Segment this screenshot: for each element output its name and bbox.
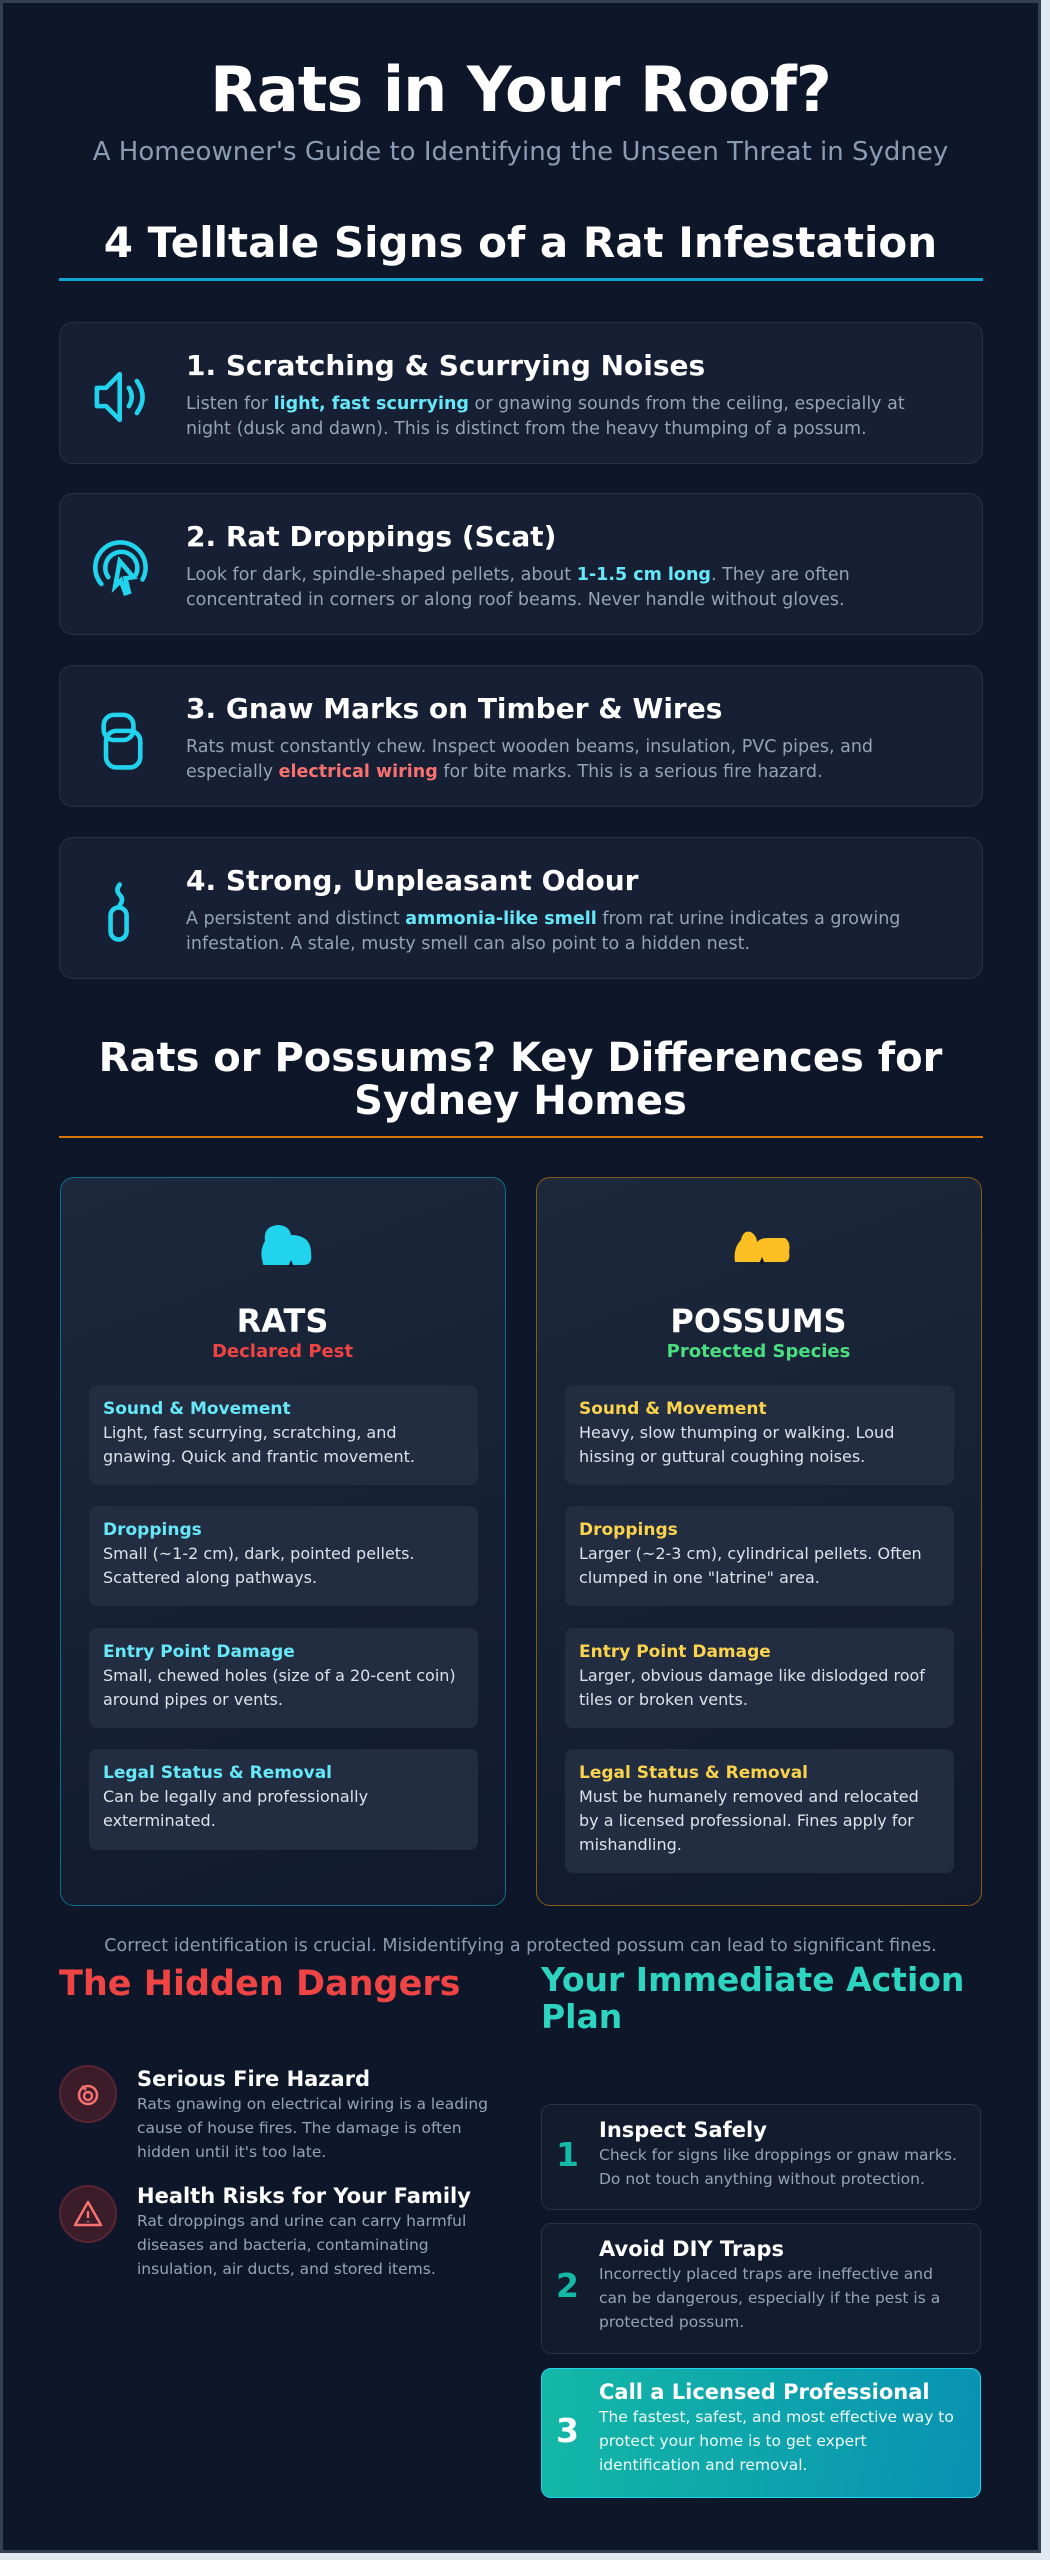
card: sign 2 droppings <box>59 493 983 635</box>
step 2: Avoid DIY Traps <box>599 2237 784 2261</box>
step 3 <box>541 2368 981 2498</box>
card: sign 2 droppings: Look for dark, spindle-shaped pellets, about 1-1.5 cm long. They are often concentrated in corners or along roof beams. Never handle without gloves. <box>186 565 850 610</box>
card: sign 1 noises: Listen for light, fast scurrying or gnawing sounds from the ceiling, especially at night (dusk and dawn). This is distinct from the heavy thumping of a possum. <box>186 394 905 438</box>
box: entry: Entry Point Damage <box>103 1642 295 1662</box>
title: Rats in Your Roof? <box>210 53 831 126</box>
box: sound <box>565 1385 954 1485</box>
icon: rat <box>261 1225 312 1267</box>
step 2 <box>541 2223 981 2354</box>
box: droppings: Small (~1-2 cm), dark, pointed pellets. Scattered along pathways. <box>103 1544 414 1587</box>
box: entry: Entry Point Damage <box>579 1642 771 1662</box>
heading: rats or possums <box>99 1035 942 1124</box>
heading: rats or possums: Sydney Homes <box>354 1078 687 1124</box>
panel: rats <box>60 1177 506 1906</box>
box: sound <box>89 1385 478 1485</box>
box: droppings: Droppings <box>579 1520 678 1540</box>
heading: action plan: Your Immediate Action <box>541 1960 964 1999</box>
heading: dangers: The Hidden Dangers <box>59 1964 460 2004</box>
card: sign 4 odour: A persistent and distinct ammonia-like smell from rat urine indicates a growing infestation. A stale, musty smell can also point to a hidden nest. <box>186 909 900 954</box>
danger: fire: Rats gnawing on electrical wiring is a leading cause of house fires. The damage is often hidden until it's too late. <box>137 2095 488 2161</box>
box: legal: Can be legally and professionally exterminated. <box>103 1787 368 1830</box>
danger: health: Health Risks for Your Family <box>137 2184 471 2208</box>
panel: possums <box>536 1177 982 1906</box>
rats title: RATS <box>237 1302 328 1340</box>
danger: fire: Serious Fire Hazard <box>137 2067 370 2091</box>
step 3: The fastest, safest, and most effective way to protect your home is to get expert identification and removal. <box>599 2408 954 2474</box>
box: entry <box>565 1628 954 1728</box>
heading: action plan: Plan <box>541 1997 622 2036</box>
box: entry: Larger, obvious damage like dislodged roof tiles or broken vents. <box>579 1666 925 1709</box>
subtitle: A Homeowner's Guide to Identifying the Unseen Threat in Sydney <box>93 137 948 167</box>
box: legal: Legal Status & Removal <box>103 1763 332 1783</box>
card: sign 3 gnaw marks: Rats must constantly chew. Inspect wooden beams, insulation, PVC pipes, and especially electrical wiring for bite marks. This is a serious fire hazard. <box>186 737 873 782</box>
box: legal <box>565 1749 954 1873</box>
danger: health: Rat droppings and urine can carry harmful diseases and bacteria, contaminating insulation, air ducts, and stored items. <box>137 2212 466 2278</box>
box: legal <box>89 1749 478 1850</box>
card: sign 4 odour <box>59 837 983 979</box>
step 2: Incorrectly placed traps are ineffective and can be dangerous, especially if the pest is a protected possum. <box>599 2265 940 2331</box>
box: entry: Small, chewed holes (size of a 20-cent coin) around pipes or vents. <box>103 1666 456 1709</box>
step 3: 3 <box>556 2411 579 2450</box>
icon: smell <box>108 882 129 942</box>
box: sound: Light, fast scurrying, scratching, and gnawing. Quick and frantic movement. <box>103 1423 415 1466</box>
panel: possums: Protected Species <box>667 1341 850 1362</box>
step 1 <box>541 2104 981 2210</box>
panel: hidden dangers <box>59 1964 488 2278</box>
danger: health <box>59 2184 471 2278</box>
card: sign 1 noises <box>59 322 983 464</box>
footnote: Correct identification is crucial. Misidentifying a protected possum can lead to significant fines. <box>104 1936 937 1956</box>
icon: gnaw <box>101 712 143 770</box>
card: sign 3 gnaw marks: 3. Gnaw Marks on Timber & Wires <box>186 692 722 725</box>
possums title: POSSUMS <box>670 1302 847 1340</box>
card: sign 2 droppings: 2. Rat Droppings (Scat) <box>186 520 556 553</box>
danger: fire <box>59 2065 488 2161</box>
box: droppings <box>89 1506 478 1606</box>
box: droppings: Droppings <box>103 1520 202 1540</box>
icon: possum <box>734 1232 790 1264</box>
box: droppings: Larger (~2-3 cm), cylindrical pellets. Often clumped in one "latrine" area. <box>579 1544 922 1587</box>
box: sound: Heavy, slow thumping or walking. Loud hissing or guttural coughing noises. <box>579 1423 894 1466</box>
box: sound: Sound & Movement <box>103 1399 291 1419</box>
step 1: Check for signs like droppings or gnaw marks. Do not touch anything without protection. <box>599 2146 957 2188</box>
step 2: 2 <box>556 2266 579 2305</box>
box: sound: Sound & Movement <box>579 1399 767 1419</box>
step 1: 1 <box>556 2135 579 2174</box>
card: sign 3 gnaw marks <box>59 665 983 807</box>
heading: telltale signs: 4 Telltale Signs of a Rat Infestation <box>104 218 937 267</box>
box: legal: Legal Status & Removal <box>579 1763 808 1783</box>
box: droppings <box>565 1506 954 1606</box>
card: sign 4 odour: 4. Strong, Unpleasant Odour <box>186 864 638 897</box>
box: legal: Must be humanely removed and relocated by a licensed professional. Fines apply for mishandling. <box>579 1787 919 1854</box>
heading: rats or possums: Rats or Possums? Key Differences for <box>99 1035 942 1081</box>
panel: rats: Declared Pest <box>212 1341 353 1362</box>
step 3: Call a Licensed Professional <box>599 2380 930 2404</box>
icon: speaker <box>94 372 145 422</box>
step 1: Inspect Safely <box>599 2118 767 2142</box>
panel: action plan <box>540 1960 981 2498</box>
heading: action plan <box>540 1960 964 2036</box>
box: entry <box>89 1628 478 1728</box>
icon: pointer <box>93 540 148 596</box>
card: sign 1 noises: 1. Scratching & Scurrying Noises <box>186 349 705 382</box>
